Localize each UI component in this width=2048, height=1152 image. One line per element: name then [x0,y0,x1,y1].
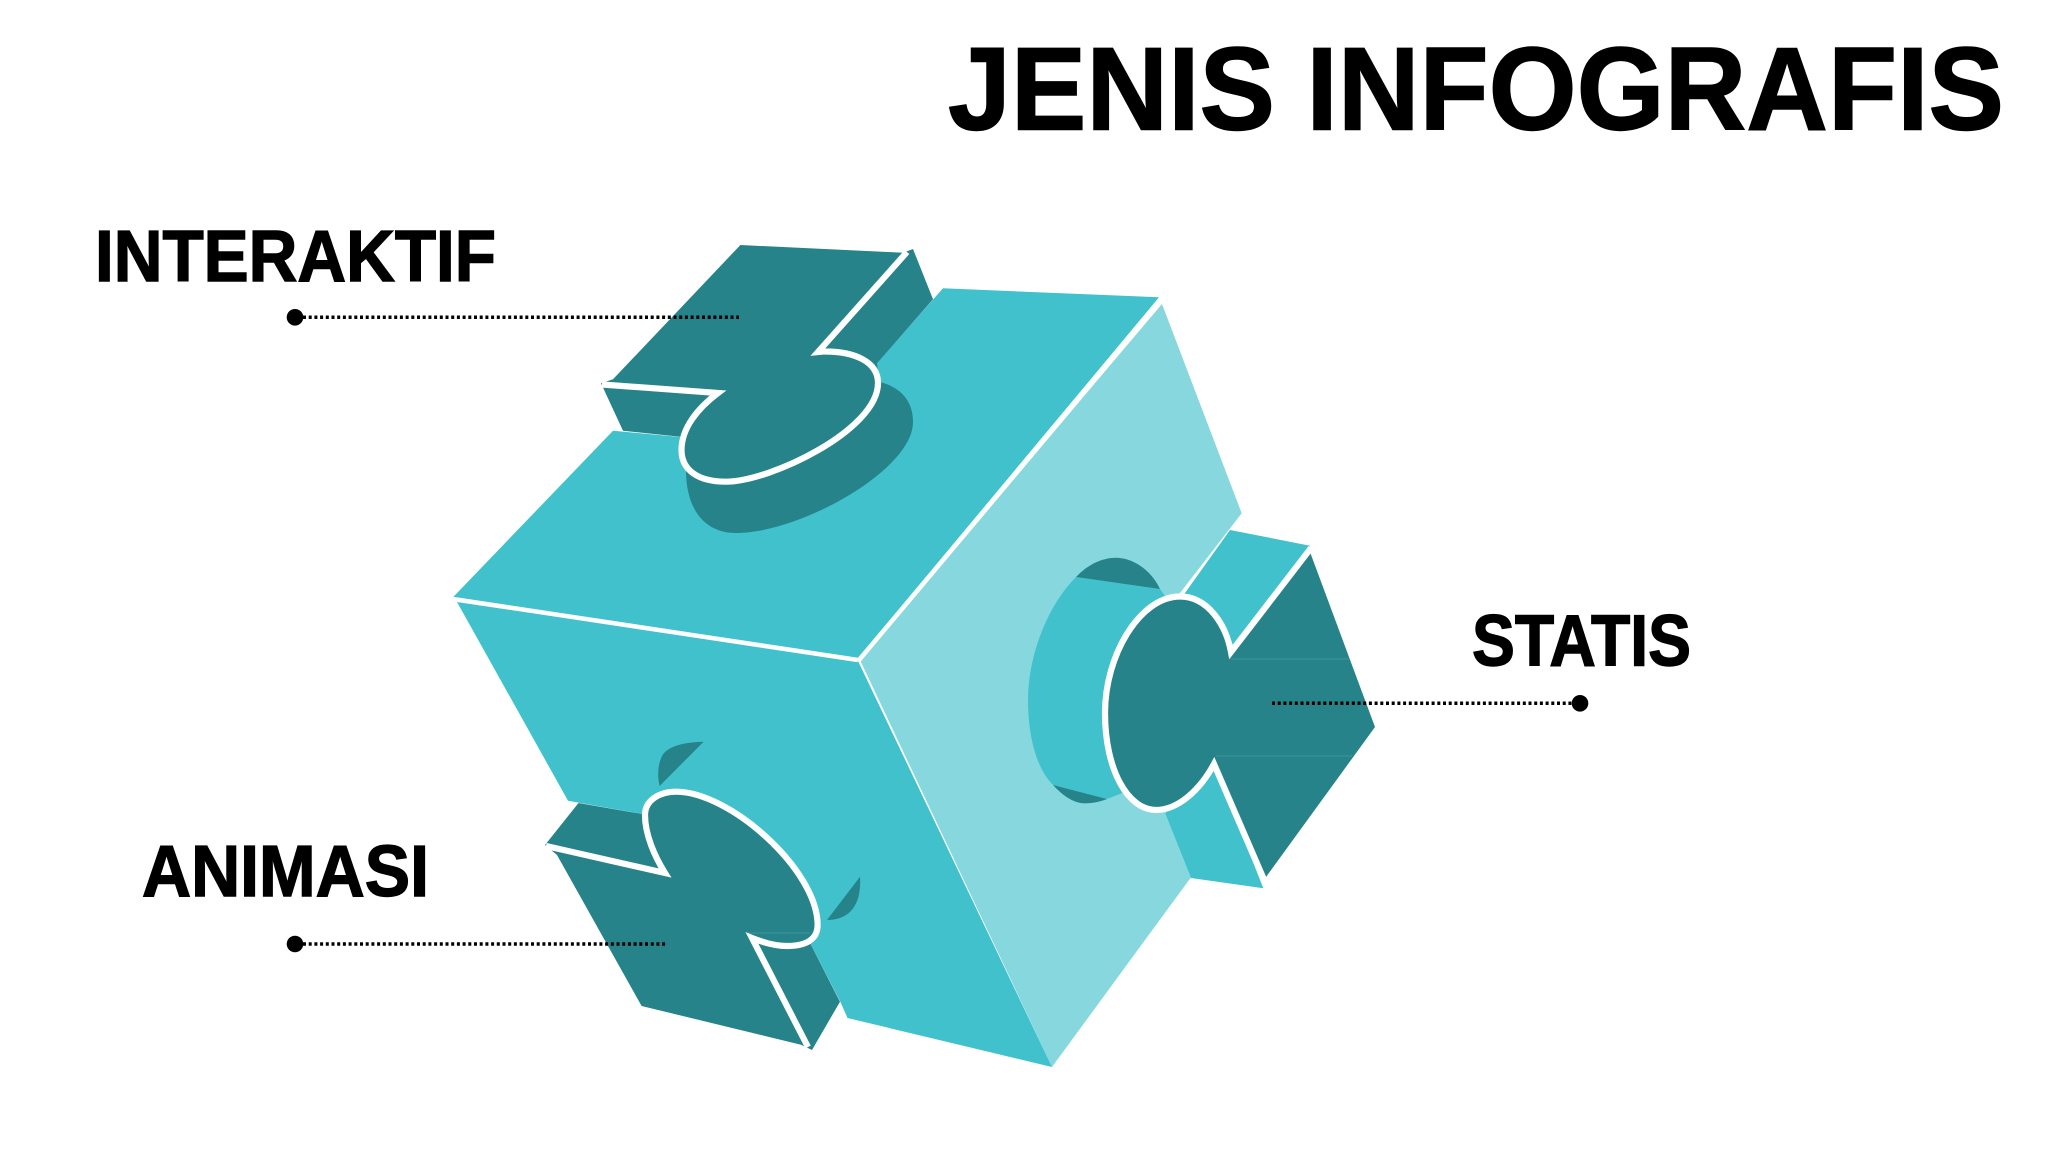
crescent lower [827,877,860,920]
label: statis [1272,602,1691,712]
socket band [1028,577,1165,799]
leader line [303,942,668,946]
label text: ANIMASI [142,832,429,912]
piece fill [545,792,840,1050]
leader dot [287,936,303,952]
piece upper side [1180,530,1310,655]
label text: INTERAKTIF [95,217,496,297]
animasi puzzle piece [545,792,840,1050]
cube edges [453,301,1161,660]
cube right face [860,304,1242,1067]
piece outline [1105,548,1311,882]
cube top face [453,288,1159,658]
label: animasi [142,832,668,952]
piece lower side [1165,765,1263,888]
piece fill [1105,552,1375,877]
piece fill [601,245,933,482]
piece outline [602,252,907,482]
title: JENIS INFOGRAFIS [948,24,2004,156]
socket bottom shadow [1053,785,1107,803]
leader line [1272,702,1572,705]
crescent upper [658,742,704,786]
socket top shadow [1076,558,1160,589]
piece outline [546,792,818,1047]
leader dot [1572,695,1588,712]
animasi socket crescents [658,742,860,920]
puzzle cube [453,245,1375,1067]
statis socket [1028,558,1165,803]
piece faint lines [1216,659,1352,756]
leader dot [287,309,303,326]
interaktif puzzle piece [601,245,933,482]
interaktif socket shadow [686,382,913,533]
label: interaktif [95,217,739,326]
piece faint line [746,932,810,934]
statis puzzle piece [1105,530,1375,888]
cube left face [457,602,1052,1067]
label text: STATIS [1472,602,1691,682]
leader line [303,316,739,319]
